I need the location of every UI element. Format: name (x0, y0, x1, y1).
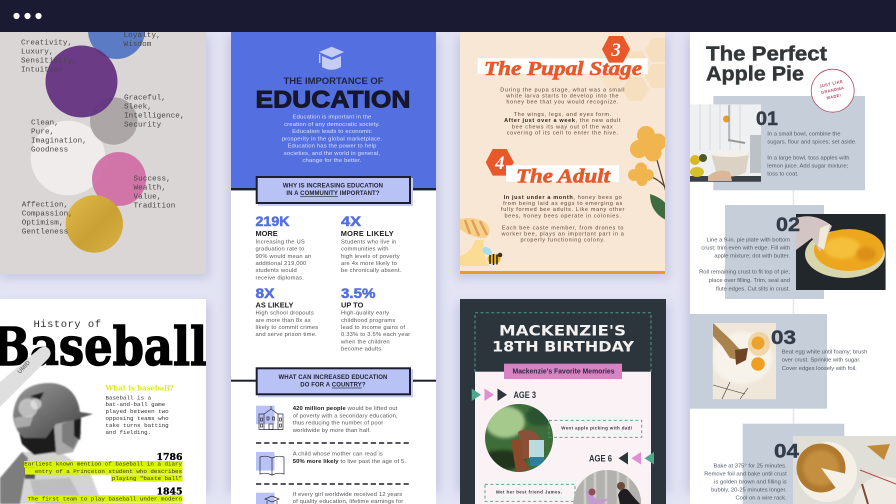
title: MACKENZIE'S (499, 324, 626, 340)
stat: 4X more likely: MORE LIKELY (341, 229, 394, 238)
badge: number 3: 3 (610, 40, 621, 61)
stat: 219K more: Increasing the US (256, 239, 305, 245)
panel: history of baseball (0, 299, 207, 504)
stat: 8X as likely: High school dropouts (256, 311, 314, 317)
stamp: just like grandma made: MADE! (826, 92, 842, 100)
step 1 text (767, 131, 857, 178)
callout: best friend (485, 484, 575, 501)
photo: mixing bowl (690, 104, 761, 182)
text: adult body: In just under a month, honey bees go (504, 195, 622, 201)
stat: 3.5% up to: childhood programs (341, 318, 396, 324)
stat: 3.5% up to: 3.5% (341, 286, 376, 301)
stamp: just like grandma made: JUST LIKE (819, 79, 843, 89)
text: 50% more likely: A child whose mother can read is (293, 452, 383, 458)
text: adult body: properly functioning colony. (520, 238, 606, 244)
stat: 3.5% up to: lead to income gains of (341, 325, 405, 331)
orange footer strip (460, 271, 665, 274)
stat: 219K more: students would (256, 268, 297, 274)
title: The Perfect (706, 43, 827, 66)
callout: what for a country (257, 368, 413, 397)
timeline entry: 1786 (24, 452, 183, 482)
intro text (282, 115, 382, 164)
stat: 8X as likely: 8X (256, 286, 274, 301)
step 2 text: apple mixture; dot with butter. (714, 254, 790, 260)
stat: 3.5% up to: UP TO (341, 300, 364, 309)
text: what is baseball: take turns batting (106, 422, 169, 429)
text: 50% more likely: 50% more likely to live past the age of 5. (293, 459, 406, 465)
icon: graduation cap (319, 47, 344, 70)
colour meaning labels: Compassion, (22, 211, 73, 219)
stat: 219K more: graduation rate to (256, 247, 305, 253)
intro text: prosperity in the global marketplace. (282, 136, 382, 142)
step 3 text: over crust. Sprinkle with sugar. (782, 358, 861, 364)
stat: 8X as likely: AS LIKELY (256, 300, 293, 309)
callout: why community: WHY IS INCREASING EDUCATION (283, 184, 383, 190)
step 4 text (704, 463, 787, 502)
memories sheet (475, 372, 651, 504)
text: what is baseball: bat-and-ball game (106, 401, 166, 408)
step 2 text: crust; trim even with edge. Fill with (701, 246, 790, 252)
colour meaning labels: Affection, (22, 202, 68, 210)
callout: why community: IN A COMMUNITY IMPORTANT? (286, 191, 380, 197)
stat: 219K more (256, 214, 311, 281)
text: what is baseball: Baseball is a (106, 394, 152, 401)
text: adult body: Each bee caste member, from drones to (502, 225, 624, 231)
step 4 text: Bake at 375° for 25 minutes. (713, 463, 787, 469)
colour circles (30, 32, 146, 253)
icon: book (256, 452, 284, 475)
intro text: Education leads to economic (292, 129, 372, 135)
text: girls education (293, 492, 403, 504)
colour meaning labels: Success, (134, 176, 171, 184)
badge: number 4 (486, 149, 514, 176)
intro text: Education has the power to help (287, 144, 377, 150)
step 1 text: toss to coat. (767, 172, 799, 178)
photo: pie filling (796, 214, 886, 290)
stat: 4X more likely: communities with (341, 247, 389, 253)
banner: favourite memories (504, 364, 622, 379)
text: pupal stage body: honey bee that you would recognize. (506, 100, 619, 106)
stat: 8X as likely: and serve prison time. (256, 332, 317, 338)
stat: 3.5% up to (340, 286, 410, 353)
step 4 text: is golden brown and filling is (714, 480, 787, 486)
colour meaning labels: Intuition (21, 67, 63, 75)
stat: 219K more: 90% would mean an (256, 254, 311, 260)
blue header band (231, 32, 436, 188)
text: 420 million people: 420 million people would be lifted out (293, 406, 398, 412)
text: what is baseball (105, 384, 174, 436)
intro text: Education is important in the (293, 115, 372, 121)
title: 18TH BIRTHDAY (492, 340, 635, 356)
timeline entry: 1786: playing "baste ball" (112, 475, 182, 482)
dashed title frame (475, 313, 651, 372)
badge: number 3 (602, 36, 630, 63)
title (492, 324, 635, 356)
stat: 4X more likely: be chronically absent. (341, 268, 402, 274)
step 1 text: In a large bowl, toss apples with (767, 156, 849, 162)
heading: education: EDUCATION (256, 86, 410, 113)
colour meaning labels: Sleek, (124, 104, 152, 112)
label: age 6: AGE 6 (589, 454, 612, 464)
stamp: just like grandma made: GRANDMA (820, 85, 845, 95)
colour meaning labels: Sensitivity, (21, 58, 77, 66)
text: pupal stage body: During the pupa stage, what was a small (500, 88, 625, 94)
markers: age 6 triangles (618, 452, 654, 464)
callout: why community (257, 177, 413, 206)
decorative honeycomb (599, 38, 672, 101)
colour meaning labels: Pure, (31, 128, 54, 136)
step 4 text: bubbly, 20-25 minutes longer. (711, 488, 787, 494)
stat: 4X more likely: are 4x more likely to (341, 261, 397, 267)
title: Apple Pie (706, 63, 804, 86)
colour meaning labels: Graceful, (124, 94, 166, 102)
step 2 text: Line a 9-in. pie plate with bottom (707, 238, 790, 244)
text: adult body: worker bee, plays an important part in a (500, 231, 625, 237)
icon: graduate (256, 493, 279, 504)
callout: apple picking: Went apple picking with dad! (561, 426, 633, 431)
colour meaning labels: Gentleness (22, 229, 68, 237)
step 3 text: Beat egg white until foamy; brush (782, 350, 867, 356)
stamp: just like grandma made (811, 69, 854, 112)
colour meaning labels: Wisdom (124, 41, 152, 49)
photo: apple picking (481, 404, 554, 472)
icon: school building (256, 406, 283, 430)
colour meaning labels: Security (124, 122, 162, 130)
step 4 text: Remove foil and bake until crust (704, 471, 787, 477)
connectors (793, 190, 794, 424)
image: baseball bat (0, 347, 51, 407)
colour meaning labels: Goodness (31, 146, 68, 154)
text: pupal stage body: bee chews its way out of the wax (512, 124, 613, 130)
timeline entry: 1786: Earliest known mention of baseball in a diary (24, 461, 182, 468)
label: age 3: AGE 3 (514, 390, 536, 400)
colour meaning labels: Wealth, (134, 184, 166, 192)
stat: 219K more: MORE (256, 229, 278, 238)
text: 420 million people: worldwide by more than half. (292, 428, 371, 434)
top browser bar (0, 0, 896, 32)
colour meaning labels: Tradition (134, 202, 175, 210)
markers: age 3 triangles (472, 388, 507, 401)
colour meaning labels: Creativity, (21, 40, 72, 48)
stat: 4X more likely: 4X (341, 214, 361, 229)
panel: honey bee life cycle (460, 32, 672, 274)
colour meaning labels: Intelligence, (124, 112, 185, 120)
text: pupal stage body: The wings, legs, and eyes form. (514, 112, 612, 118)
illustration: honey dipper and bee (460, 218, 502, 266)
step 2 text (699, 238, 790, 292)
text: adult body (500, 195, 625, 244)
stat: 4X more likely (341, 214, 402, 274)
colour meaning labels: Luxury, (21, 49, 54, 57)
timeline entry: 1845 (27, 486, 182, 504)
intro text: change for the better. (302, 158, 362, 164)
timeline entry: 1845: The first team to play baseball under modern (28, 495, 182, 502)
step 3 text (782, 350, 867, 372)
badge: number 4: 4 (494, 153, 504, 174)
stat: 8X as likely: likely to commit crimes (256, 325, 318, 331)
stat: 4X more likely: Students who live in (341, 239, 397, 245)
number 04: 04 (774, 441, 800, 462)
intro text: creation of any democratic society. (284, 122, 380, 128)
step 4 text: Cool on a wire rack. (735, 496, 787, 502)
text: 420 million people: thus reducing the number of poor (293, 421, 383, 427)
stat: 3.5% up to: High-quality early (341, 311, 389, 317)
stat: 4X more likely: high levels of poverty (341, 254, 400, 260)
heading: the adult: The Adult (516, 165, 612, 187)
colour meaning labels (21, 32, 185, 237)
stat: 8X as likely: are more than 8x as (256, 318, 311, 324)
callout: what for a country: WHAT CAN INCREASED EDUCATION (279, 375, 387, 381)
stat: 219K more: additional 219,000 (256, 261, 306, 267)
step 3 text: Cover edges loosely with foil. (782, 366, 857, 372)
number 01: 01 (756, 109, 778, 130)
text: adult body: fully formed bee adults. Like many other (501, 207, 625, 213)
stat: 3.5% up to: become adults. (341, 347, 383, 353)
step 4 (704, 424, 896, 504)
text: pupal stage body (500, 88, 625, 136)
timeline entry: 1786: 1786 (156, 452, 183, 463)
step 3 (690, 314, 867, 409)
text: adult body: from being laid as eggs to emerging as (503, 201, 623, 207)
timeline entry: 1786: entry of a Princeton student who describes (35, 468, 182, 475)
step 1 text: sugars, flour and spices; set aside. (767, 139, 857, 145)
heading: the pupal stage: The Pupal Stage (484, 58, 642, 80)
text: pupal stage body: covering of its cell to enter the hive. (507, 130, 619, 136)
stat: 3.5% up to: when the children (340, 339, 390, 345)
text: pupal stage body: white larva starts to develop into the (505, 94, 619, 100)
title (706, 43, 827, 86)
stat: 3.5% up to: 0.33% to 3.5% each year (341, 332, 410, 338)
text: girls education: If every girl worldwide received 12 years (293, 492, 402, 498)
text: adult body: bees, honey bees operate in colonies. (504, 213, 622, 219)
stat: 219K more: receive diplomas. (256, 275, 304, 281)
colour meaning labels: Optimism, (22, 220, 64, 228)
stat: 219K more: 219K (256, 214, 290, 229)
timeline entry: 1845: 1845 (156, 486, 182, 497)
colour meaning labels: Value, (134, 194, 161, 202)
callout: best friend: Met her best friend James. (496, 489, 562, 494)
heading: the adult (506, 165, 619, 183)
step 2 text: place over filling. Trim, seal and (709, 278, 790, 284)
intro text: societies, and the world in general, (284, 151, 380, 157)
step 2 (699, 205, 886, 299)
number 03: 03 (771, 328, 796, 349)
step 2 text: flute edges. Cut slits in crust. (716, 286, 790, 292)
stat: 8X as likely (256, 286, 318, 338)
icon: window dots (13, 13, 42, 19)
text: what is baseball: What is baseball? (105, 384, 174, 393)
number 02: 02 (776, 215, 800, 236)
photo: flour and eggs (712, 323, 776, 399)
text: what is baseball: opposing teams who (106, 415, 169, 422)
illustration: flowers and leaf (628, 126, 666, 220)
text: what is baseball: played between two (106, 408, 169, 415)
colour meaning labels: Clean, (31, 120, 59, 128)
text: what is baseball: and fielding. (106, 429, 151, 436)
step 1 (690, 96, 865, 190)
callout: apple picking (549, 420, 642, 437)
step 1 text: In a small bowl, combine the (767, 131, 840, 137)
colour meaning labels: Imagination, (31, 138, 87, 146)
panel: mackenzie's birthday (460, 299, 666, 504)
panel: perfect apple pie recipe (690, 32, 896, 504)
photo: best friend (573, 467, 641, 504)
text: pupal stage body: After just over a week, the new adult (504, 118, 621, 124)
heading: History of: History of (34, 319, 102, 331)
text: 420 million people: of poverty with a secondary education, (293, 413, 398, 419)
banner: favourite memories: Mackenzie's Favorite Memories (512, 367, 614, 376)
image: batter (0, 383, 102, 504)
image: baseball bat: UMID (17, 360, 32, 375)
colour meaning labels: Loyalty, (124, 32, 161, 40)
text: 420 million people (292, 406, 398, 434)
panel: colour meanings poster (0, 32, 206, 274)
heading: the importance of: THE IMPORTANCE OF (284, 76, 384, 86)
panel: importance of education (231, 32, 436, 504)
text: 50% more likely (293, 452, 406, 465)
step 1 text: lemon juice. Add sugar mixture; (767, 164, 849, 170)
step 2 text: Roll remaining crust to fit top of pie; (699, 270, 790, 276)
callout: what for a country: DO FOR A COUNTRY? (300, 383, 366, 389)
photo: baked pie (793, 436, 896, 504)
